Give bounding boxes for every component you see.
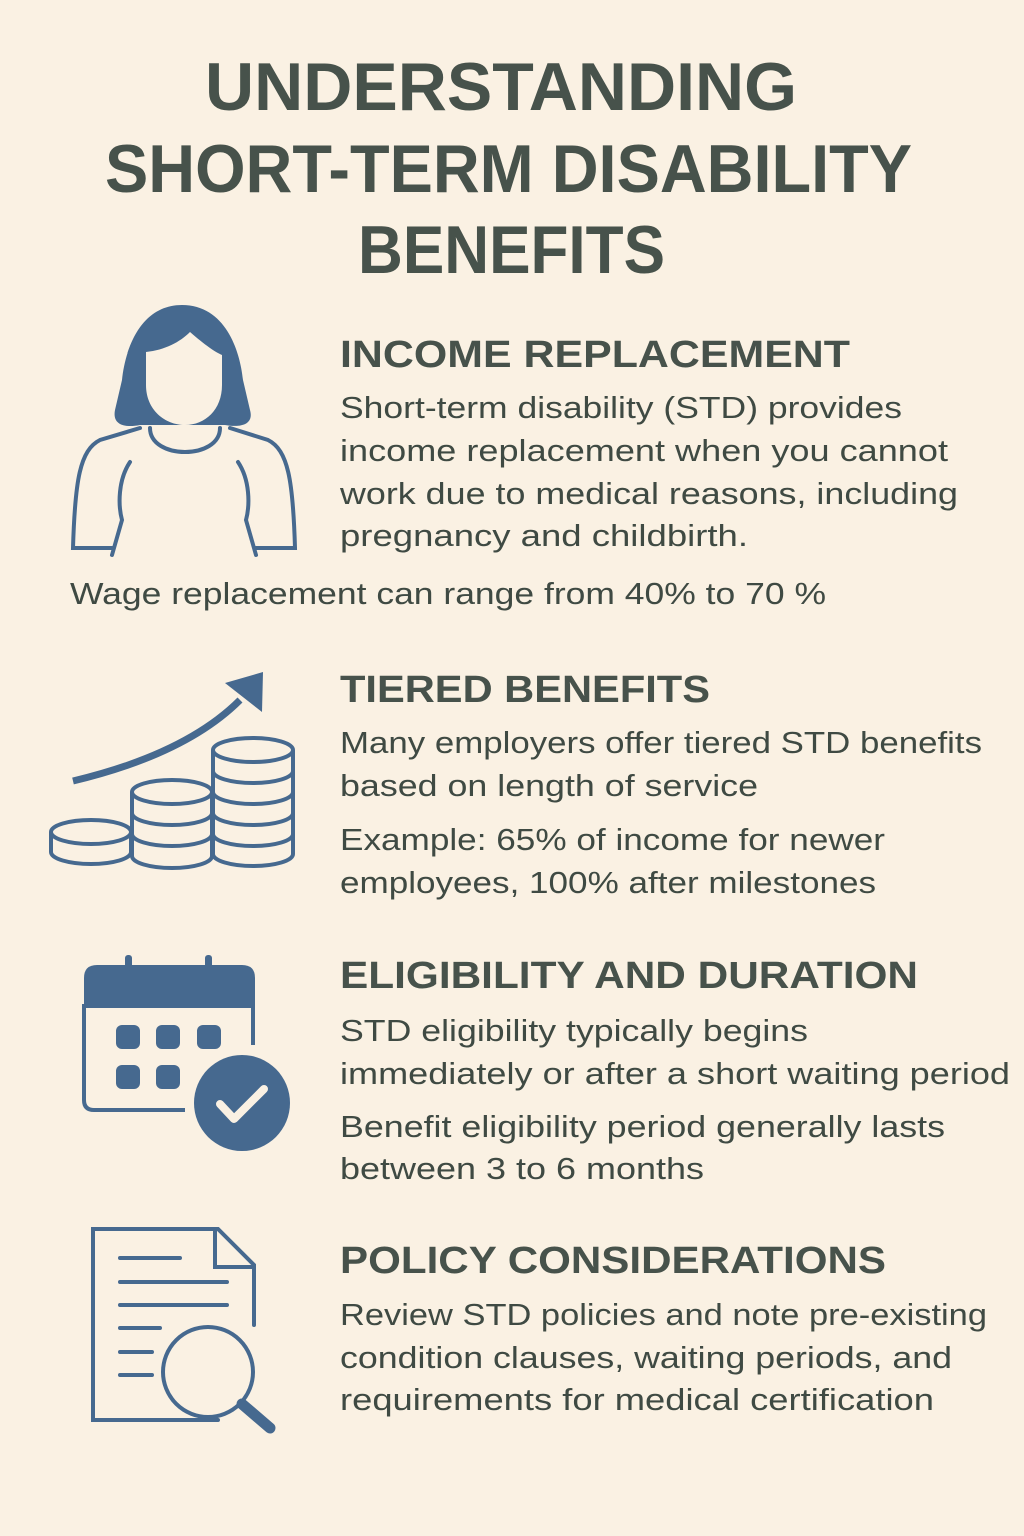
icon: woman	[73, 305, 295, 555]
text: income replacement: INCOME REPLACEMENT	[340, 334, 850, 376]
text: tiered benefits: employees, 100% after milestones	[340, 865, 876, 900]
text: wage replacement: Wage replacement can range from 40% to 70 %	[70, 576, 826, 611]
text: income replacement: work due to medical reasons, including	[339, 476, 958, 511]
text: eligibility and duration: Benefit eligibility period generally lasts	[340, 1109, 945, 1144]
text: eligibility and duration: between 3 to 6 months	[340, 1151, 704, 1186]
text: income replacement	[339, 334, 958, 553]
text: eligibility and duration: immediately or after a short waiting period	[340, 1056, 1010, 1091]
text: income replacement: income replacement when you cannot	[340, 433, 948, 468]
icon: coins with arrow	[51, 672, 293, 868]
text: income replacement: pregnancy and childbirth.	[340, 518, 748, 553]
text: income replacement: Short-term disability (STD) provides	[340, 390, 902, 425]
title: BENEFITS	[358, 212, 665, 288]
title	[105, 49, 912, 288]
text: policy considerations: requirements for medical certification	[340, 1382, 934, 1417]
title: UNDERSTANDING	[205, 49, 797, 125]
text: tiered benefits: TIERED BENEFITS	[340, 669, 710, 711]
text: policy considerations: condition clauses, waiting periods, and	[340, 1340, 952, 1375]
icon: calendar with check	[84, 955, 290, 1151]
text: tiered benefits	[340, 669, 982, 900]
text: eligibility and duration	[340, 955, 1010, 1186]
text: eligibility and duration: ELIGIBILITY AND DURATION	[340, 955, 918, 997]
text: policy considerations: Review STD policies and note pre-existing	[340, 1297, 987, 1332]
text: policy considerations: POLICY CONSIDERATIONS	[340, 1240, 886, 1282]
text: tiered benefits: Example: 65% of income for newer	[340, 822, 885, 857]
text: eligibility and duration: STD eligibility typically begins	[340, 1013, 808, 1048]
text: tiered benefits: based on length of service	[340, 768, 758, 803]
icon: document with magnifier	[93, 1229, 270, 1428]
title: SHORT-TERM DISABILITY	[105, 131, 912, 207]
text: tiered benefits: Many employers offer tiered STD benefits	[340, 725, 982, 760]
text: policy considerations	[340, 1240, 987, 1417]
